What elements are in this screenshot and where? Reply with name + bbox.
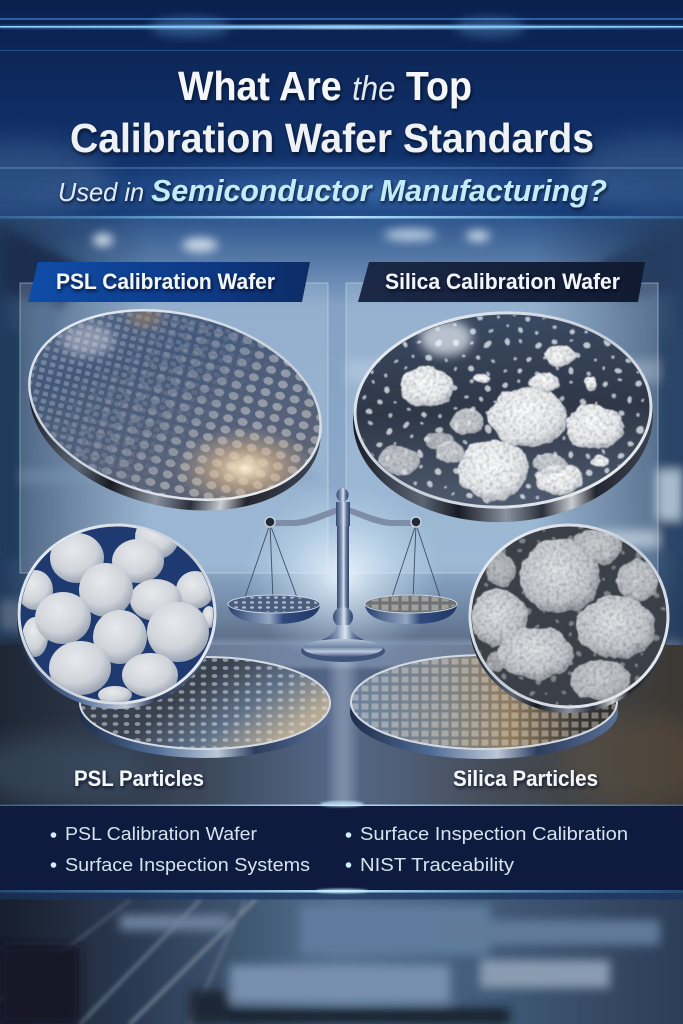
icon: balance scale [228,488,457,662]
PSL particles magnified circle [17,515,216,709]
Silica particles magnified circle [468,524,670,713]
PSL calibration wafer [28,309,322,510]
glass panel: Silica [346,283,658,573]
bullet: PSL Calibration Wafer: PSL Calibration Wafer [65,824,257,844]
bullet: Surface Inspection Calibration: Surface Inspection Calibration [360,824,628,844]
glass panel: PSL [20,283,328,573]
ribbon: Silica Calibration Wafer [358,262,645,302]
bullet: Surface Inspection Systems: Surface Inspection Systems [65,855,310,875]
title panel [0,0,683,228]
subtitle: Used in Semiconductor Manufacturing? [58,173,607,208]
label: Silica Particles: Silica Particles [453,766,598,791]
label: PSL Particles: PSL Particles [74,766,204,791]
ribbon: PSL Calibration Wafer [28,262,310,302]
keyword band [0,801,683,900]
ribbon: Silica Calibration Wafer: Silica Calibration Wafer [385,269,620,294]
title line 1: What Are the Top [178,63,472,109]
title line 2: Calibration Wafer Standards [70,115,594,161]
right pan [365,595,457,624]
Silica calibration wafer [353,311,653,522]
bottom PSL wafer [79,657,331,758]
bottom Silica wafer [350,655,618,759]
bullet: NIST Traceability: NIST Traceability [360,855,514,875]
left pan [228,595,320,624]
glow behind balance [243,485,443,665]
ribbon: PSL Calibration Wafer: PSL Calibration Wafer [56,269,275,294]
